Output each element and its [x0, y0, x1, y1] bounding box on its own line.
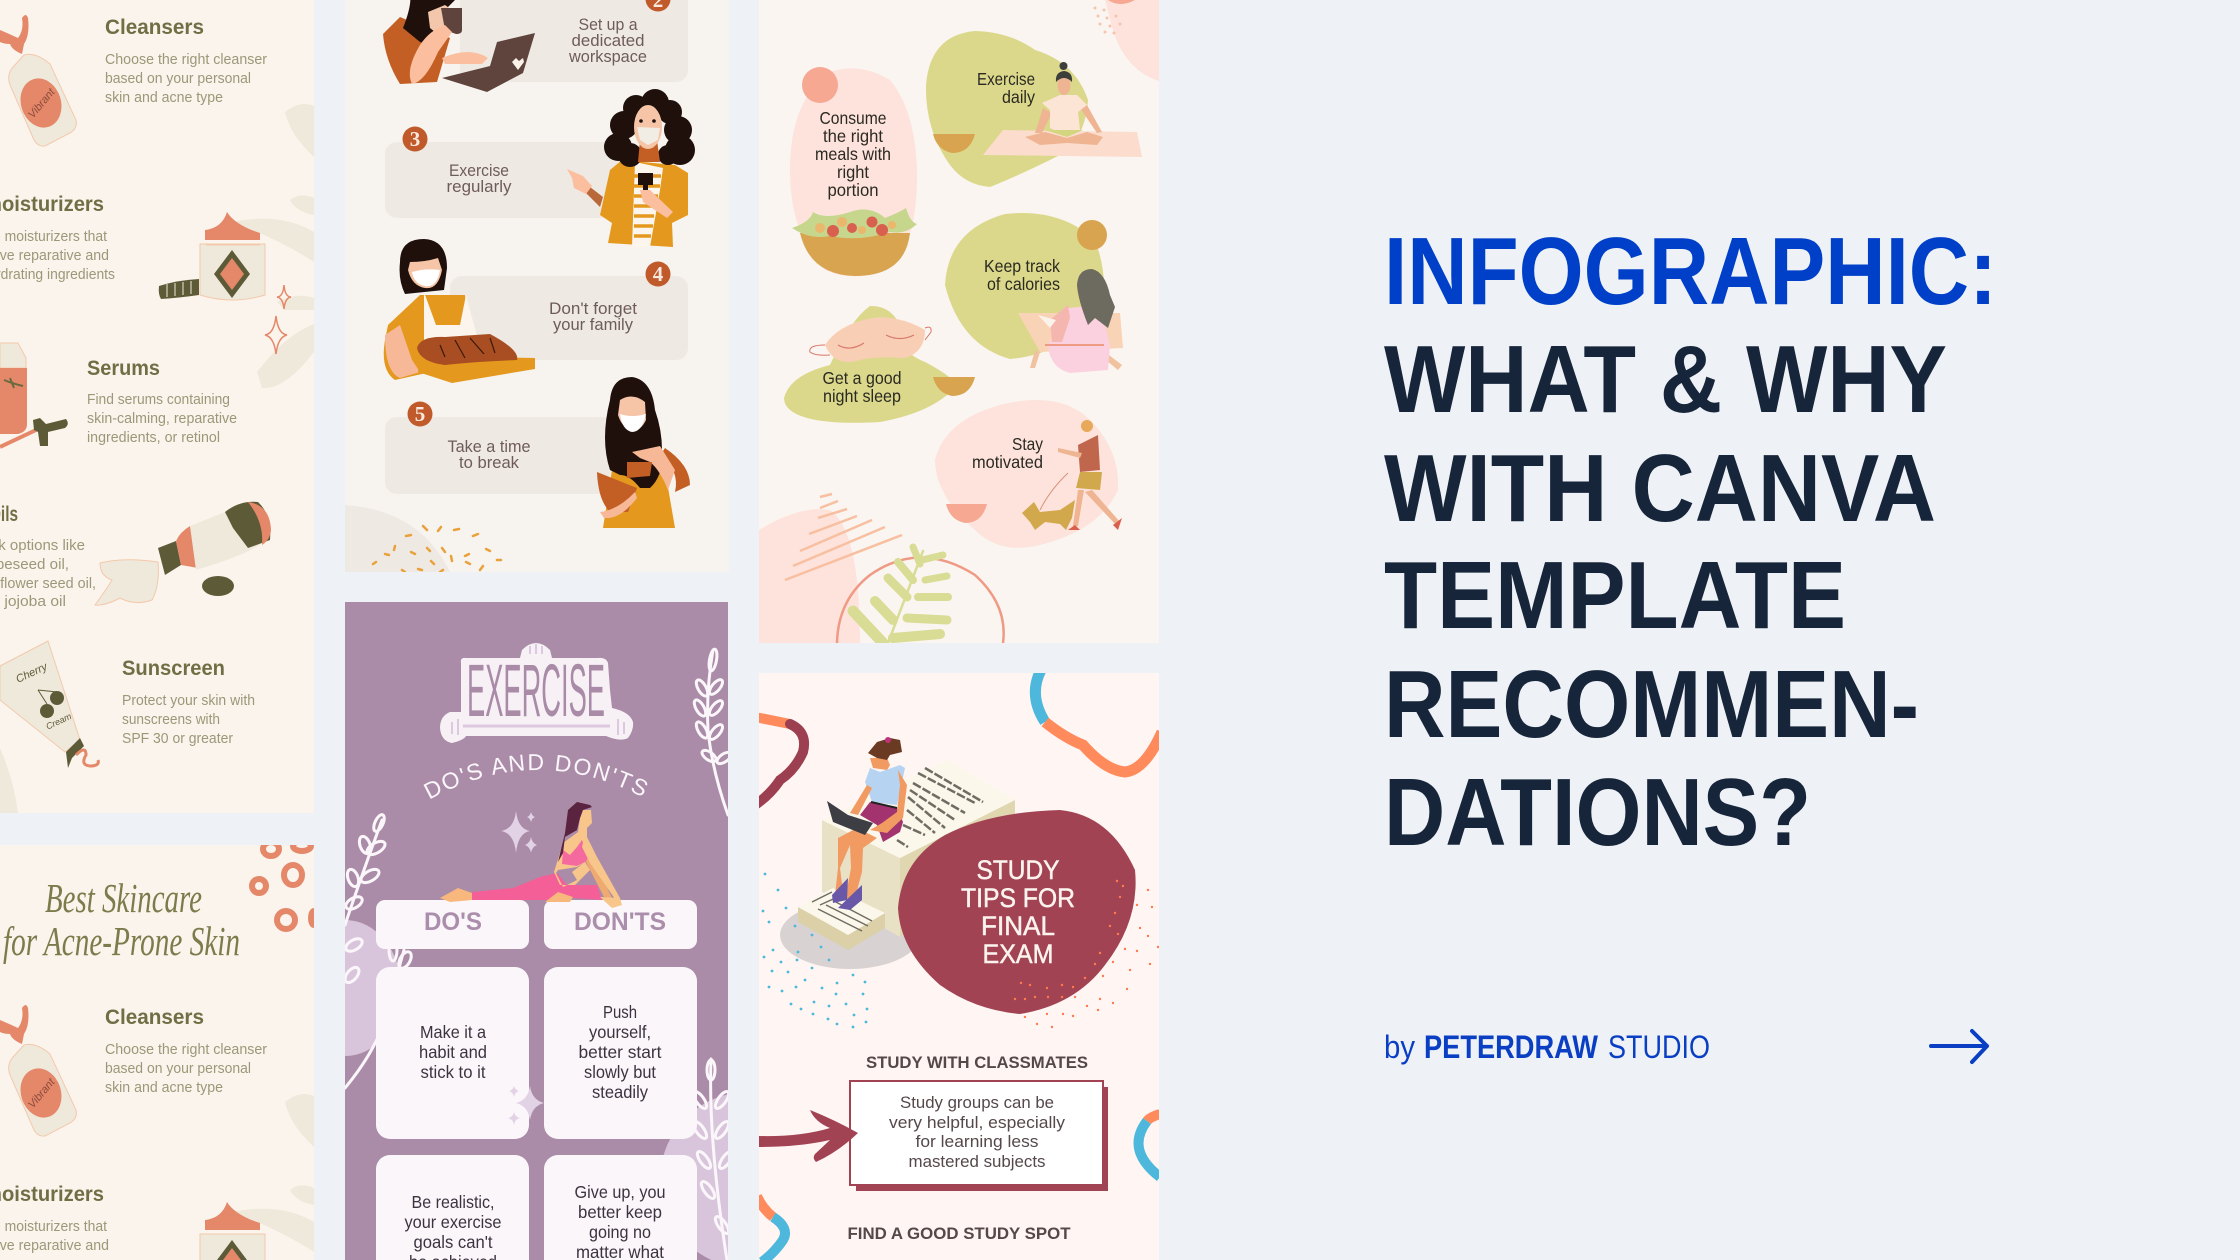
text: cleansers body: based on your personal	[105, 1061, 251, 1077]
text: sunscreen body: Protect your skin with	[122, 693, 255, 709]
byline: PETERDRAW	[1424, 1029, 1599, 1065]
card: do's header	[376, 900, 529, 949]
byline: by	[1384, 1029, 1415, 1065]
text: step 5: Take a time	[448, 437, 530, 456]
card: do 2: your exercise	[404, 1212, 502, 1232]
icon: cream jar	[159, 212, 265, 300]
text: consume the right meals: the right	[823, 126, 883, 146]
text: sunscreen body	[122, 693, 255, 747]
icon: ring decorations	[252, 841, 317, 929]
text: cleansers body: Choose the right cleanser	[105, 1042, 267, 1058]
heading: serums: Serums	[87, 357, 160, 380]
text: consume the right meals: Consume	[820, 108, 886, 128]
panel: exercise do's and don'ts	[345, 602, 728, 1260]
panel: study tips	[755, 670, 1162, 1260]
card: don't 1: Push	[603, 1002, 637, 1022]
icon: oil bottle	[95, 502, 271, 605]
text: exercise daily: daily	[1002, 87, 1035, 107]
panel: skincare top	[0, 0, 314, 813]
icon: badge 5	[408, 402, 432, 426]
icon: badge 4: 4	[653, 262, 664, 286]
decoration: corner blob and dashes	[345, 505, 501, 572]
title: main headline: RECOMMEN-	[1384, 651, 1919, 758]
icon: sunscreen tube	[0, 641, 98, 768]
card: do 1: habit and	[419, 1042, 487, 1062]
text: cleansers body	[105, 52, 267, 106]
blob: study tips title: FINAL	[981, 911, 1055, 941]
icon: gold circle	[1077, 220, 1107, 250]
illustration: woman with laptop	[383, 0, 535, 92]
text: step 2: dedicated	[572, 31, 644, 50]
illustration: isometric woman on papers	[780, 737, 1015, 969]
blob: study tips title: STUDY	[976, 855, 1060, 885]
icon: sunscreen tube: Cream	[44, 711, 74, 732]
panel: work from home tips	[345, 0, 729, 572]
heading: study with classmates: STUDY WITH CLASSMATES	[866, 1053, 1088, 1072]
icon: sunscreen tube: Cherry	[14, 660, 51, 686]
icon: cleanser bottle	[0, 1005, 76, 1136]
title: best skincare	[3, 875, 240, 964]
text: consume the right meals: portion	[828, 180, 878, 200]
band: step 4	[450, 276, 688, 360]
heading: find a good study spot: FIND A GOOD STUDY SPOT	[848, 1224, 1071, 1243]
text: step 2	[568, 15, 647, 66]
heading: cleansers: Cleansers	[105, 1006, 204, 1029]
icon: bowl	[933, 134, 975, 153]
card: do 1: Make it a	[420, 1022, 486, 1042]
decoration: right sprigs	[691, 649, 735, 1260]
text: consume the right meals: right	[837, 162, 869, 182]
title: main headline: DATIONS?	[1384, 759, 1811, 866]
icon: badge 5: 5	[415, 402, 425, 426]
card: don'ts header	[544, 900, 697, 949]
icon: badge 3: 3	[410, 127, 420, 151]
blob: keep track	[945, 213, 1104, 359]
byline	[1384, 1029, 1710, 1065]
illustration: woman with bread tray	[384, 239, 535, 383]
blob: exercise daily	[926, 31, 1088, 187]
decoration: bottom left shapes	[759, 494, 1004, 643]
decoration: lilac circles	[289, 920, 836, 1260]
blob: consume meals	[790, 68, 917, 276]
arrow: maroon pointer	[759, 1110, 858, 1162]
band: step 3	[385, 142, 625, 218]
blob: study tips title	[898, 810, 1136, 1014]
text: cleansers body: Choose the right cleanser	[105, 52, 267, 68]
text: moisturizers body	[0, 229, 115, 283]
title: main headline: WITH CANVA	[1384, 435, 1936, 542]
icon: bowl	[946, 504, 987, 523]
text: keep track of calories	[984, 256, 1060, 294]
text: cleansers body	[105, 1042, 267, 1096]
text: consume the right meals	[815, 108, 891, 200]
card: don't 1: steadily	[592, 1082, 648, 1102]
decoration: top right blob and dots	[1094, 0, 1159, 81]
icon: cleanser bottle: Vibrant	[26, 1076, 58, 1111]
heading: cleansers: Cleansers	[105, 16, 204, 39]
card: don't 1: yourself,	[589, 1022, 651, 1042]
card: don'ts header: DON'TS	[574, 908, 666, 936]
title: main headline	[1384, 218, 1997, 866]
illustration: sleep mask and blob	[784, 306, 957, 423]
decoration: right ring	[1139, 1114, 1160, 1177]
card: don't 2: Give up, you	[574, 1182, 666, 1202]
card: do 2: goals can't	[414, 1232, 493, 1252]
text: get a good night sleep	[822, 368, 902, 406]
illustration: yoga woman	[440, 802, 622, 908]
panel: skincare bottom	[0, 841, 317, 1260]
illustration: woman pointing with phone	[567, 89, 695, 247]
band: step 5	[385, 417, 615, 494]
text: serums body: skin-calming, reparative	[87, 411, 237, 427]
text: cleansers body: skin and acne type	[105, 90, 223, 106]
icon: cleanser bottle: Vibrant	[26, 86, 58, 121]
decoration: squiggle top left	[755, 717, 804, 805]
byline: STUDIO	[1608, 1029, 1710, 1065]
text: keep track of calories: of calories	[987, 274, 1060, 294]
illustration: salad bowl	[792, 208, 917, 276]
blob: stay motivated	[935, 400, 1118, 548]
card: don't 1: better start	[578, 1042, 662, 1062]
text: exercise daily	[977, 69, 1035, 107]
card: don't 2: better keep	[578, 1202, 662, 1222]
icon: salmon circle	[802, 67, 838, 103]
decoration: blue dots	[762, 873, 868, 1028]
text: get a good night sleep: night sleep	[823, 386, 901, 406]
title: exercise barbell sticker	[440, 643, 633, 743]
text: sunscreen body: sunscreens with	[122, 712, 220, 728]
text: serums body: ingredients, or retinol	[87, 430, 220, 446]
text: moisturizers body	[0, 1219, 109, 1254]
icon: badge 3	[402, 126, 428, 152]
icon: cleanser bottle	[0, 15, 76, 146]
text: stay motivated: Stay	[1012, 434, 1043, 454]
heading: sunscreen: Sunscreen	[122, 657, 225, 680]
blob: study tips title: EXAM	[982, 939, 1054, 969]
text: step 2: workspace	[568, 47, 647, 66]
title: main headline: INFOGRAPHIC:	[1384, 218, 1997, 325]
text: stay motivated: motivated	[972, 452, 1043, 472]
arrow: right	[1931, 1031, 1987, 1062]
text: step 2: Set up a	[578, 15, 638, 34]
illustration: woman writing at desk	[1018, 269, 1123, 373]
text: step 4: your family	[553, 315, 633, 334]
text: cleansers body: based on your personal	[105, 71, 251, 87]
text: keep track of calories: Keep track	[984, 256, 1060, 276]
icon: cream jar	[200, 1202, 265, 1260]
icon: serum bottle	[0, 343, 68, 447]
card: do's header: DO'S	[424, 908, 482, 936]
icon: sparkles	[501, 811, 537, 853]
text: cleansers body: skin and acne type	[105, 1080, 223, 1096]
icon: card sparkles	[508, 1086, 544, 1125]
decoration: left sprigs	[342, 813, 414, 1088]
callout: study groups box: Study groups can be	[900, 1093, 1054, 1112]
text: stay motivated	[972, 434, 1043, 472]
icon: sparkles	[265, 285, 291, 354]
text: sunscreen body: SPF 30 or greater	[122, 731, 233, 747]
icon: bowl	[933, 377, 975, 396]
text: serums body	[87, 392, 237, 446]
text: step 3	[448, 164, 512, 196]
panel: healthy habits	[759, 0, 1159, 643]
text: step 5	[448, 437, 530, 472]
card: don't 2	[544, 1155, 697, 1260]
card: do 2: Be realistic,	[412, 1192, 494, 1212]
icon: badge 4	[646, 262, 670, 286]
text: step 5: to break	[459, 453, 519, 472]
card: do 1	[376, 967, 529, 1139]
card: don't 1	[544, 967, 697, 1139]
text: step 4	[549, 299, 637, 334]
callout: study groups box	[850, 1081, 1108, 1191]
panel: exercise do's and don'ts: EXERCISE	[467, 649, 605, 732]
title: main headline: WHAT & WHY	[1384, 326, 1947, 433]
blob: study tips title: TIPS FOR	[961, 883, 1075, 913]
decoration: orange dots	[1014, 880, 1159, 1028]
band: step 2	[460, 0, 688, 82]
card: don't 2: going no	[589, 1222, 651, 1242]
text: step 4: Don't forget	[549, 299, 637, 318]
card: do 1: stick to it	[420, 1062, 486, 1082]
title: best skincare: Best Skincare	[45, 875, 202, 921]
icon: badge 2	[646, 0, 670, 12]
decoration: bottom left squiggle	[757, 1196, 785, 1260]
text: consume the right meals: meals with	[815, 144, 891, 164]
illustration: man walking dog	[1022, 420, 1122, 530]
card: do 2	[376, 1155, 529, 1260]
text: exercise daily: Exercise	[977, 69, 1035, 89]
illustration: woman pouring into bowl	[597, 377, 690, 528]
text: step 3: regularly	[446, 177, 512, 196]
callout: study groups box: for learning less	[916, 1132, 1038, 1151]
text: step 3: Exercise	[449, 161, 509, 180]
text: get a good night sleep: Get a good	[822, 368, 902, 388]
subtitle: do's and don'ts arc: DO'S AND DON'TS	[424, 754, 648, 799]
decoration: squiggle top right	[1035, 670, 1162, 772]
callout: study groups box: mastered subjects	[908, 1152, 1046, 1171]
card: don't 1: slowly but	[584, 1062, 656, 1082]
title: best skincare: for Acne-Prone Skin	[3, 918, 240, 964]
callout: study groups box: very helpful, especially	[889, 1113, 1066, 1132]
illustration: meditating woman	[983, 62, 1142, 157]
text: oils body	[0, 538, 96, 610]
title: main headline: TEMPLATE	[1384, 542, 1846, 649]
text: serums body: Find serums containing	[87, 392, 230, 408]
